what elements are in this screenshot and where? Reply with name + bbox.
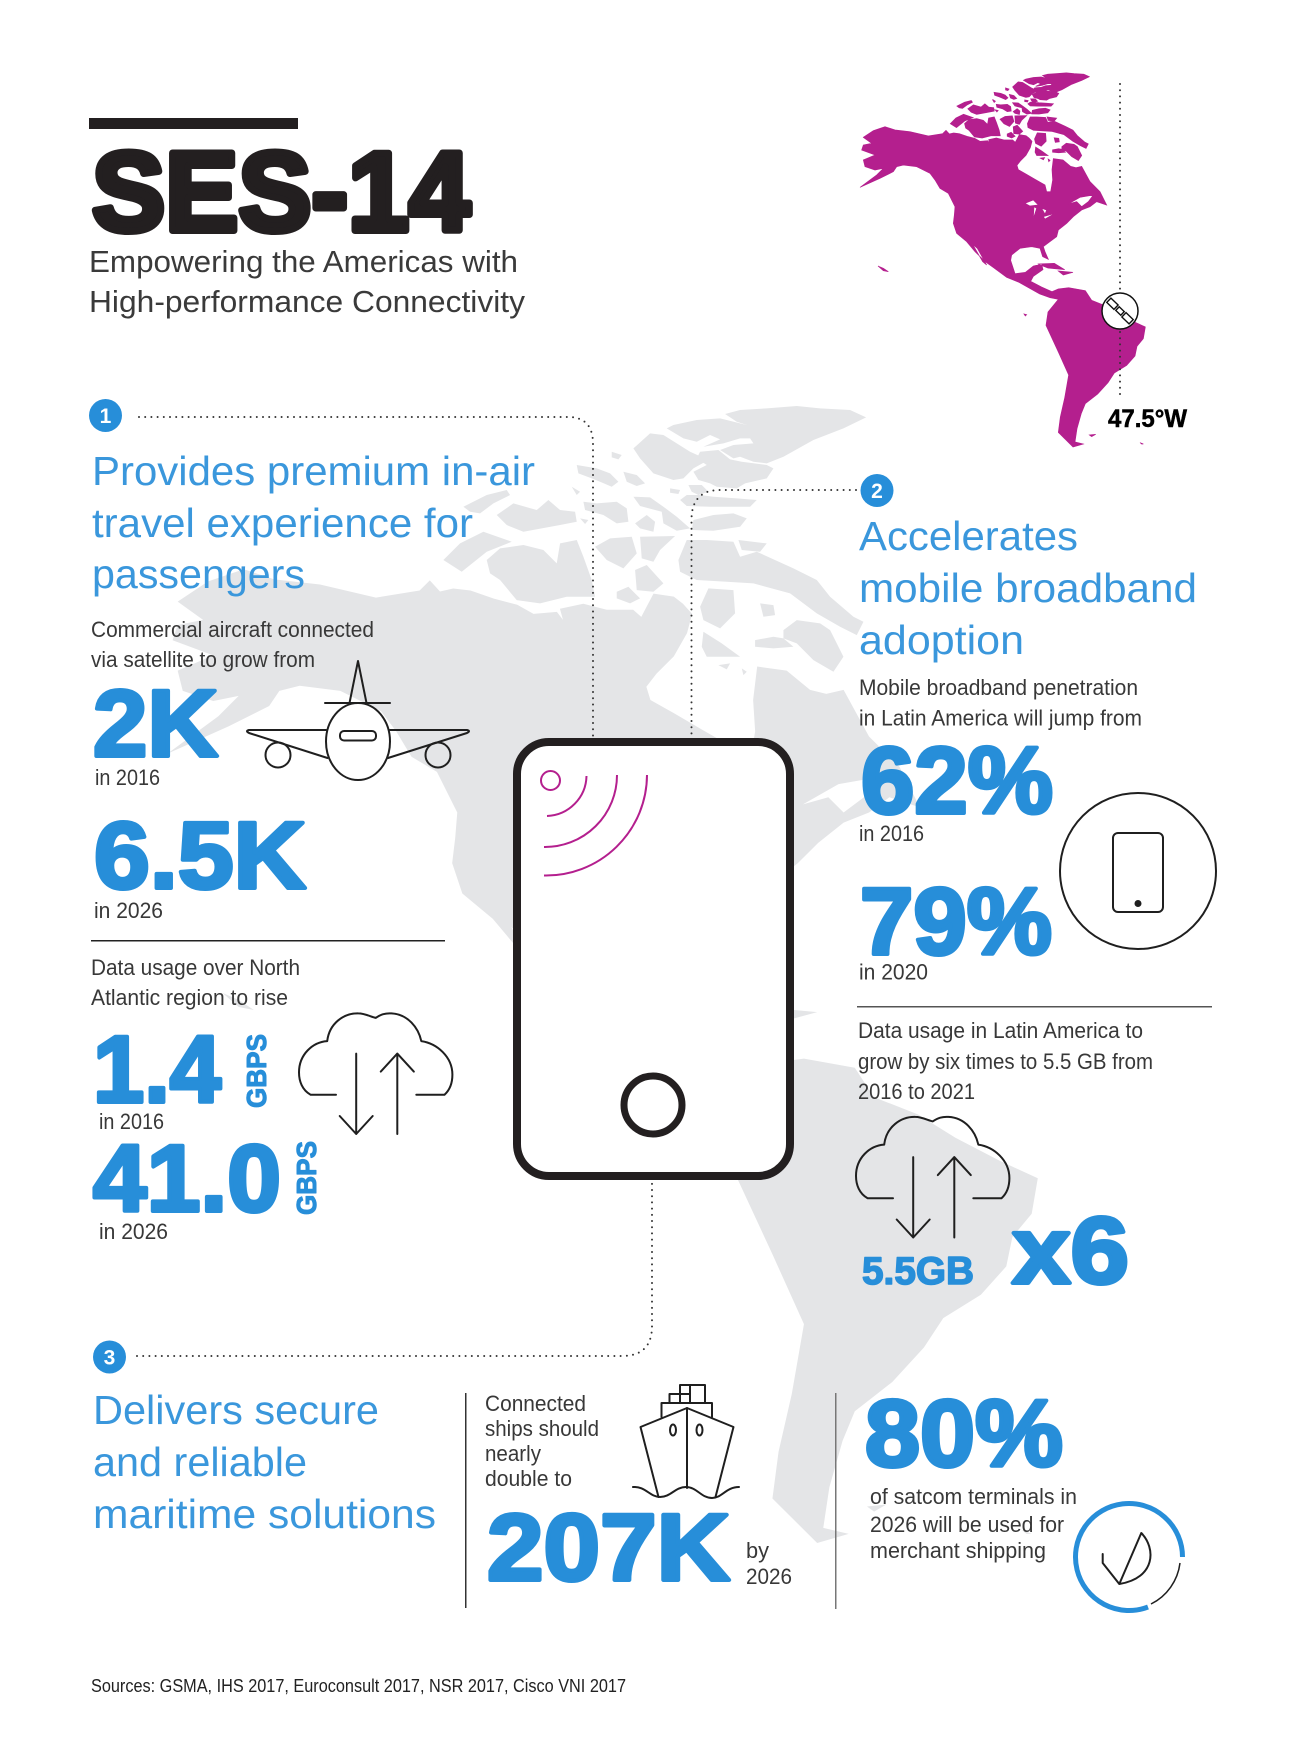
panel: section 1 in-air xyxy=(89,399,535,1244)
stat: 62%: 62% xyxy=(861,728,1053,834)
aircraft intro text xyxy=(91,617,374,672)
connector: dotted line from section 3 to device xyxy=(137,1182,652,1356)
mobile broadband intro text xyxy=(859,675,1142,730)
data usage intro text xyxy=(91,955,300,1010)
data usage Latin America text: 2016 to 2021 xyxy=(858,1079,975,1104)
heading 3: and reliable xyxy=(93,1439,307,1485)
stat: 5.5GB: 5.5GB xyxy=(862,1250,974,1293)
aircraft intro text: via satellite to grow from xyxy=(91,647,315,672)
stat: x6: x6 xyxy=(1012,1198,1129,1304)
coverage map: magenta Americas xyxy=(860,73,1145,447)
satcom description xyxy=(870,1484,1077,1563)
panel: section 2 mobile broadband xyxy=(856,474,1216,1304)
icon: cloud with up and down arrows xyxy=(299,1013,452,1134)
heading 3: Delivers secure xyxy=(93,1387,379,1433)
label: in 2016: in 2016 xyxy=(859,821,924,846)
ships intro text: ships should xyxy=(485,1416,599,1441)
heading 1: travel experience for xyxy=(92,500,473,546)
data usage intro text: Data usage over North xyxy=(91,955,300,980)
icon: smartphone in circle xyxy=(1060,793,1216,949)
label: in 2026: in 2026 xyxy=(99,1219,168,1244)
heading 2: mobile broadband xyxy=(859,565,1197,611)
icon: airplane xyxy=(247,661,469,780)
sources: Sources: GSMA, IHS 2017, Euroconsult 2017, NSR 2017, Cisco VNI 2017 xyxy=(91,1676,626,1696)
device: central tablet xyxy=(517,742,790,1176)
label: by 2026 xyxy=(746,1538,792,1589)
heading 2: Accelerates xyxy=(859,513,1078,559)
heading 1 xyxy=(92,448,535,597)
heading 3: maritime solutions xyxy=(93,1491,436,1537)
heading 1: Provides premium in-air xyxy=(92,448,535,494)
label: in 2020: in 2020 xyxy=(859,960,928,984)
unit: GBPS: GBPS xyxy=(241,1034,272,1108)
device home button xyxy=(624,1076,682,1134)
subtitle: High-performance Connectivity xyxy=(89,284,526,319)
heading 3 xyxy=(93,1387,436,1537)
mobile broadband intro text: in Latin America will jump from xyxy=(859,706,1142,730)
icon: cloud with up and down arrows xyxy=(856,1117,1009,1238)
stat: 207K: 207K xyxy=(487,1495,730,1601)
stat: 1.4: 1.4 xyxy=(93,1017,221,1123)
title rule xyxy=(89,118,298,129)
stat: 6.5K: 6.5K xyxy=(94,803,306,909)
satcom description: 2026 will be used for xyxy=(870,1512,1064,1537)
ships intro text: double to xyxy=(485,1466,572,1491)
data usage intro text: Atlantic region to rise xyxy=(91,985,288,1010)
icon: ship xyxy=(633,1385,739,1498)
longitude label: 47.5°W xyxy=(1108,405,1187,433)
label: in 2016: in 2016 xyxy=(99,1109,164,1134)
data usage Latin America text: Data usage in Latin America to xyxy=(858,1018,1143,1043)
heading 2 xyxy=(859,513,1197,663)
badge 2 xyxy=(860,474,894,507)
data usage Latin America text: grow by six times to 5.5 GB from xyxy=(858,1049,1153,1074)
satcom description: of satcom terminals in xyxy=(870,1484,1077,1509)
badge 2: 2 xyxy=(871,480,883,503)
label: by 2026: 2026 xyxy=(746,1564,792,1589)
heading 2: adoption xyxy=(859,617,1024,663)
aircraft intro text: Commercial aircraft connected xyxy=(91,617,374,642)
badge 3: 3 xyxy=(104,1346,115,1370)
badge 1: 1 xyxy=(100,405,112,428)
stat: 41.0: 41.0 xyxy=(93,1126,281,1232)
unit: GBPS: GBPS xyxy=(291,1141,322,1215)
label: in 2016: in 2016 xyxy=(95,765,160,790)
ships intro text xyxy=(485,1391,599,1491)
badge 1 xyxy=(89,399,122,432)
icon: satellite in circle xyxy=(1102,293,1138,329)
badge 3 xyxy=(93,1340,126,1374)
label: in 2026: in 2026 xyxy=(94,898,163,923)
data usage Latin America text xyxy=(858,1018,1153,1104)
stat: 2K: 2K xyxy=(93,671,218,777)
satcom description: merchant shipping xyxy=(870,1538,1046,1563)
icon: signal waves xyxy=(541,771,647,876)
stat: 80%: 80% xyxy=(865,1381,1063,1487)
panel: section 3 maritime xyxy=(93,1340,1182,1610)
title: SES-14 xyxy=(92,130,470,254)
subtitle xyxy=(89,244,526,319)
connector: dotted line from section 2 to device xyxy=(692,490,856,736)
subtitle: Empowering the Americas with xyxy=(89,244,518,279)
icon: 80 percent ring with dish xyxy=(1076,1503,1182,1610)
orbital longitude line xyxy=(1119,84,1121,398)
ships intro text: Connected xyxy=(485,1391,586,1416)
stat: 79%: 79% xyxy=(860,869,1052,975)
connector: dotted line from section 1 to device xyxy=(139,417,593,736)
label: by 2026: by xyxy=(746,1538,769,1563)
background map: grey Americas xyxy=(168,406,1038,1543)
heading 1: passengers xyxy=(92,551,305,597)
ships intro text: nearly xyxy=(485,1441,541,1466)
mobile broadband intro text: Mobile broadband penetration xyxy=(859,675,1138,700)
